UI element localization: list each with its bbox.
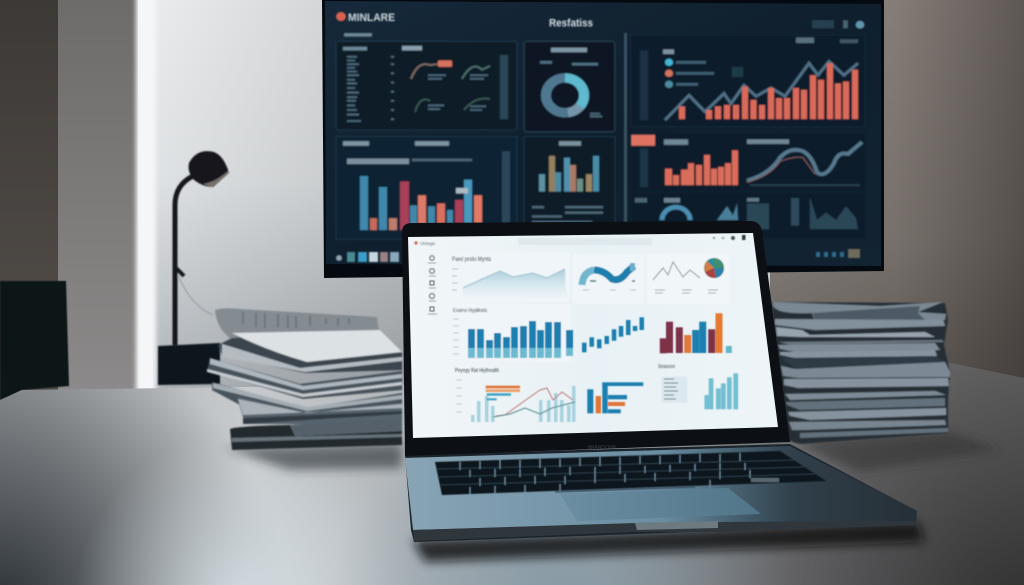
panel: area chart: [448, 252, 570, 302]
laptop dashboard content: [414, 235, 746, 422]
trackpad: [560, 488, 761, 521]
vertical divider: [624, 33, 627, 262]
panel: stacked blue bars: [449, 304, 573, 362]
laptop brand label: BRANDCHIP: [588, 445, 617, 451]
desk lamp: [158, 151, 229, 385]
screen top bar: [414, 235, 746, 246]
laptop shadow on desk: [412, 522, 925, 562]
laptop lid bezel: [402, 221, 790, 456]
panel: legend card with teal bars: [658, 364, 738, 409]
wall monitor with dark dashboard: [322, 0, 884, 278]
dark cabinet on the left: [0, 281, 69, 401]
keyboard: [435, 451, 826, 495]
panel: monitor small multi-colour bars: [524, 137, 615, 239]
panel: combo chart: Peyngy Rat Hiythealth: [455, 368, 499, 374]
panel: blue wave chart: [572, 254, 644, 304]
laptop screen: [408, 233, 778, 438]
panel: area chart: Paed prolio Mynta: [452, 256, 491, 263]
faded print on the top sheet: [243, 312, 349, 328]
monitor header: MINLARE: [348, 11, 395, 24]
shadows of the stacks on the desk: [225, 432, 1000, 472]
monitor screen: [325, 1, 881, 266]
desk surface: [0, 340, 1024, 585]
background wall: [0, 0, 1024, 410]
paper stack on the left: [207, 308, 402, 450]
screen sidebar icons: [428, 256, 437, 314]
panel: combo chart: [455, 368, 576, 422]
screen top bar: Vintage: [420, 241, 436, 246]
panel: monitor top-left list: [336, 33, 517, 130]
panel: line and pie chart: [647, 254, 729, 304]
panel: monitor bottom-right small charts: [631, 193, 865, 238]
panel: monitor lower red bars and trend: [631, 134, 865, 191]
panel: monitor bottom-left bar chart: [336, 137, 517, 239]
laptop: [402, 221, 917, 542]
panel: floating range bars: [582, 317, 644, 352]
panel: monitor main red bar and line chart: [631, 35, 865, 127]
monitor bottom-right status icons: [816, 249, 860, 258]
monitor bottom toolbar icons: [336, 252, 399, 262]
panel: monitor donut chart: [524, 41, 615, 132]
laptop base: [405, 444, 917, 542]
panel: stacked blue bars: Exams Hypiliods: [453, 308, 487, 314]
paper stack on the right: [772, 302, 950, 444]
panel: mixed horizontal bars: [587, 382, 643, 413]
monitor header: [336, 11, 864, 29]
panel: maroon orange blue bars: [660, 313, 732, 353]
panel: legend card with teal bars: Seasoon: [658, 364, 675, 370]
monitor header: Resfatiss: [549, 18, 593, 29]
